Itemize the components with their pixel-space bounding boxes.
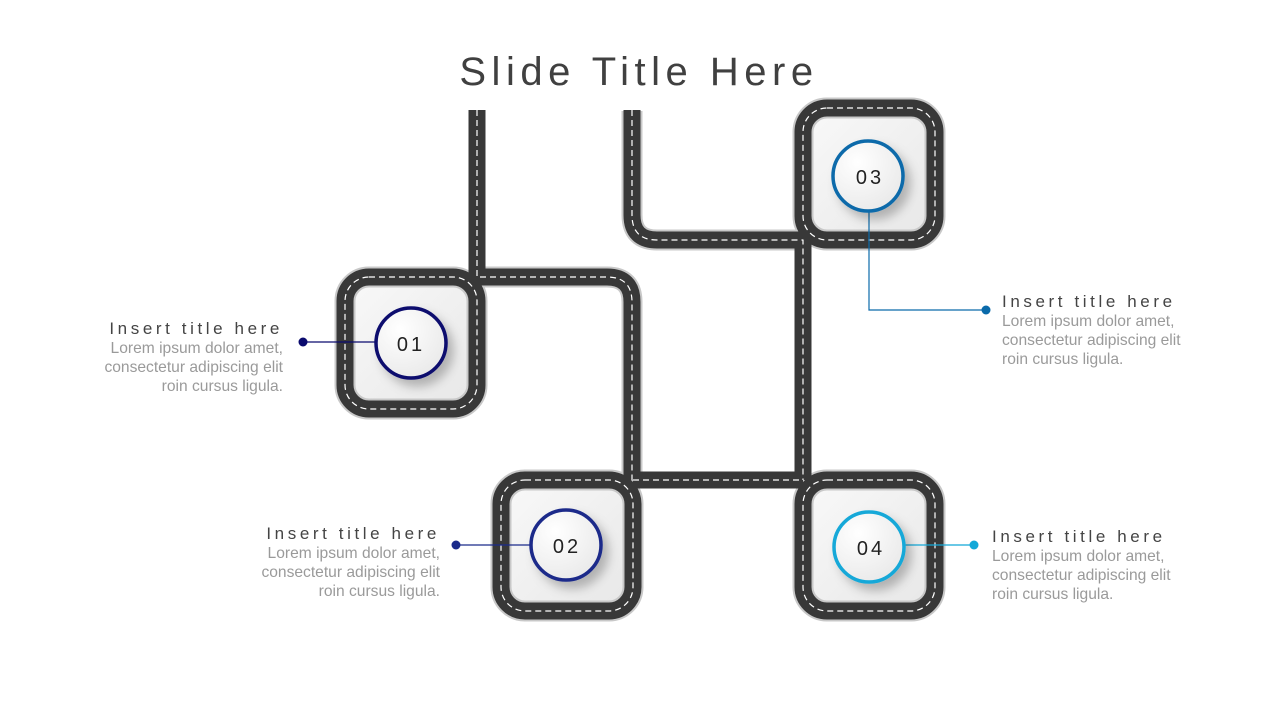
circle 03: [833, 141, 903, 211]
text block 04: Lorem ipsum dolor amet,: [992, 548, 1164, 565]
text block 03: [1002, 292, 1181, 368]
text block 02: Lorem ipsum dolor amet,: [268, 545, 440, 562]
connector lines: [303, 212, 986, 545]
road network: [345, 108, 935, 611]
text block 02: roin cursus ligula.: [319, 583, 440, 600]
text block 01: roin cursus ligula.: [162, 378, 283, 395]
text block 01: Insert title here: [109, 319, 283, 338]
inner squares: [354, 118, 926, 603]
text block 04: roin cursus ligula.: [992, 586, 1113, 603]
text block 01: consectetur adipiscing elit: [104, 359, 284, 376]
circle 03: 03: [856, 167, 884, 189]
text block 03: Insert title here: [1002, 292, 1176, 311]
text block 03: consectetur adipiscing elit: [1002, 332, 1181, 349]
circle 02: 02: [553, 536, 581, 558]
text block 04: consectetur adipiscing elit: [992, 567, 1171, 584]
text block 01: [104, 319, 284, 395]
text block 02: [261, 524, 441, 600]
circle 04: 04: [857, 538, 885, 560]
text block 03: roin cursus ligula.: [1002, 351, 1123, 368]
circle 01: [376, 308, 446, 378]
text block 02: Insert title here: [266, 524, 440, 543]
text block 03: Lorem ipsum dolor amet,: [1002, 313, 1174, 330]
circle 02: [531, 510, 601, 580]
text block 02: consectetur adipiscing elit: [261, 564, 441, 581]
circle 04: [834, 512, 904, 582]
text block 04: Insert title here: [992, 527, 1166, 546]
title: Slide Title Here: [459, 50, 819, 94]
connector dots: [298, 306, 990, 550]
circle 01: 01: [397, 334, 425, 356]
text block 01: Lorem ipsum dolor amet,: [111, 340, 283, 357]
text block 04: [992, 527, 1171, 603]
